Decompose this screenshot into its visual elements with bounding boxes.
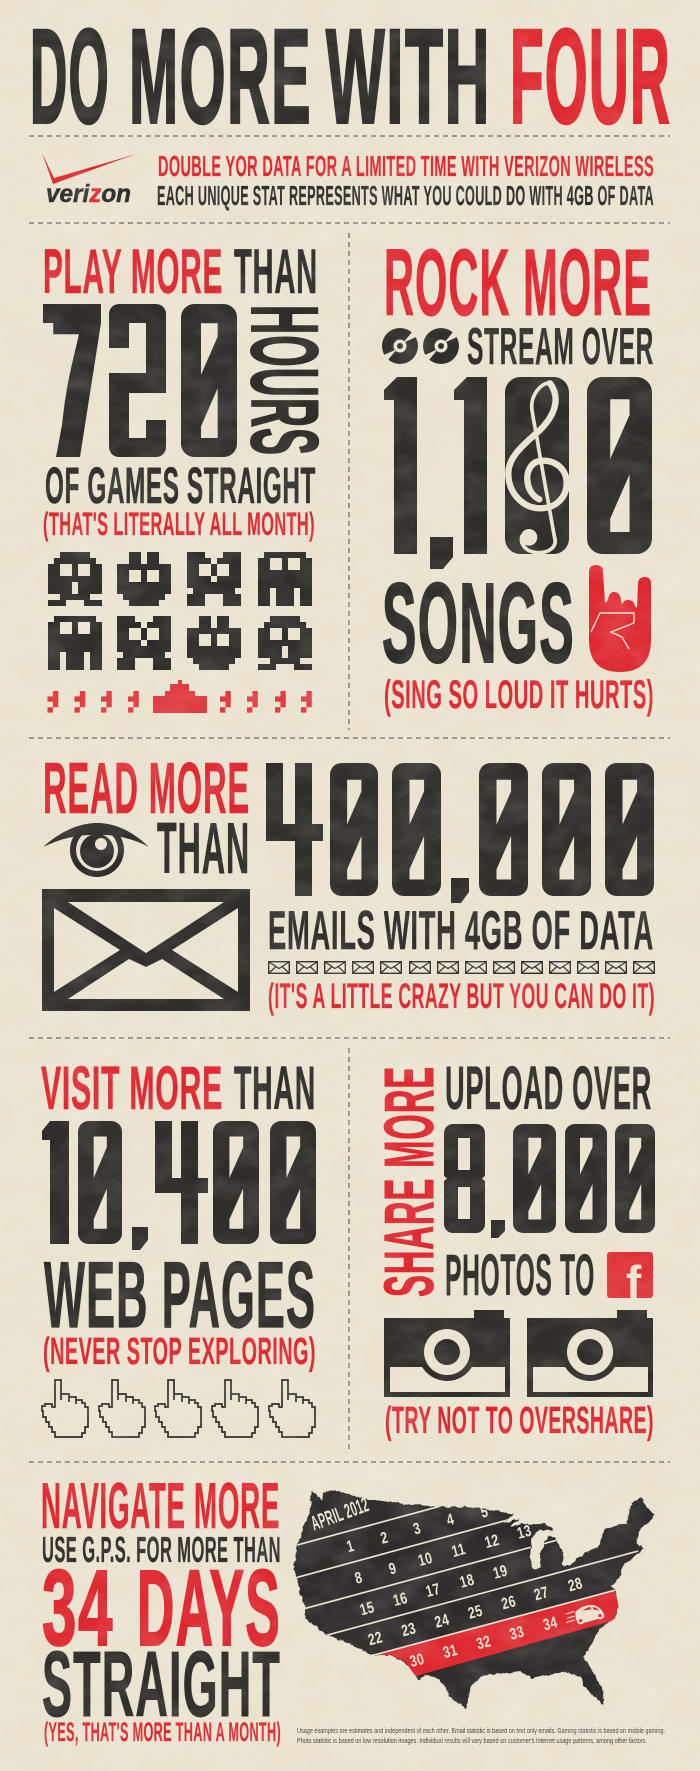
stat: 400,000 xyxy=(265,726,654,932)
calendar dates: 4 xyxy=(445,1511,456,1530)
calendar dates: 26 xyxy=(500,1593,518,1614)
stat: 1,100: 0 xyxy=(507,334,567,602)
infographic canvas: 0 xyxy=(272,1092,314,1276)
icon: eye xyxy=(43,823,149,877)
icon: facebook: f xyxy=(626,1256,642,1308)
map silhouette xyxy=(294,1490,655,1708)
stat: 720: 7 xyxy=(50,265,94,500)
stat: 400,000: 0 xyxy=(481,732,526,931)
calendar dates: 1 xyxy=(345,1537,356,1557)
red band and calendar rules xyxy=(290,1505,647,1676)
stat: 1,100: 1 xyxy=(396,330,415,604)
infographic canvas: USE G.P.S. FOR MORE THAN xyxy=(42,1529,281,1570)
verizon logo xyxy=(42,153,136,208)
icon: facebook xyxy=(607,1252,653,1308)
infographic canvas: NAVIGATE MORE xyxy=(41,1469,280,1542)
infographic canvas: (YES, THAT'S MORE THAN A MONTH) xyxy=(44,1717,281,1747)
infographic canvas: STRAIGHT xyxy=(42,1632,281,1736)
stat: 34 days: 34 xyxy=(42,1547,114,1668)
calendar dates: 11 xyxy=(450,1541,468,1561)
icon row: small envelopes xyxy=(269,962,654,973)
stat: 400,000: 0 xyxy=(544,732,589,931)
title xyxy=(30,2,671,152)
stat: 8,000: 0 xyxy=(515,1099,554,1263)
calendar dates: 17 xyxy=(424,1580,442,1602)
heading: play more than: PLAY MORE xyxy=(43,237,223,307)
icon: cameras xyxy=(384,1310,653,1397)
panel: read more xyxy=(42,726,655,1016)
title: MORE xyxy=(129,2,312,152)
panel: play more: THAN xyxy=(234,237,318,307)
infographic canvas: DAYS xyxy=(137,1547,281,1668)
stat: 8,000: 8 xyxy=(446,1095,482,1263)
title: DO xyxy=(30,2,110,152)
infographic canvas: SHARE MORE xyxy=(370,1066,448,1297)
calendar dates: 31 xyxy=(441,1641,460,1663)
stat: 8,000: , xyxy=(493,1193,503,1237)
stat: 8,000 xyxy=(443,1095,655,1263)
calendar dates: 24 xyxy=(433,1611,451,1632)
calendar dates: 8 xyxy=(353,1569,365,1588)
stat: 720: 2 xyxy=(111,265,164,500)
calendar dates: 25 xyxy=(466,1602,485,1623)
panel: play more: 0 xyxy=(183,267,235,497)
calendar dates: 3 xyxy=(411,1520,423,1539)
panel: navigate more xyxy=(41,1469,281,1747)
calendar dates: 16 xyxy=(391,1589,410,1611)
calendar dates: 5 xyxy=(479,1503,490,1522)
calendar dates: 32 xyxy=(475,1633,493,1654)
infographic canvas: 0 xyxy=(617,1099,653,1263)
calendar dates: 28 xyxy=(566,1575,585,1596)
calendar dates: 23 xyxy=(400,1620,418,1641)
stat: 10,400: 4 xyxy=(157,1088,205,1278)
calendar dates: 9 xyxy=(387,1560,399,1579)
stat: 400,000: , xyxy=(454,839,466,901)
stat: 10,400 xyxy=(42,1087,316,1279)
infographic canvas: THAN xyxy=(234,1054,316,1122)
chart: calendar map of the USA xyxy=(290,1490,655,1708)
stat: 10,400: 0 xyxy=(215,1092,257,1276)
stat: 34 days xyxy=(42,1547,281,1668)
calendar month label: APRIL 2012 xyxy=(308,1493,372,1535)
panel: read more: READ MORE xyxy=(43,749,250,829)
stat: 10,400: 1 xyxy=(51,1087,68,1279)
infographic canvas: WEB PAGES xyxy=(44,1242,316,1347)
icon: compact discs xyxy=(382,328,459,364)
stat: 400,000: 0 xyxy=(394,732,439,931)
calendar dates: 22 xyxy=(366,1629,385,1650)
panel: play more xyxy=(43,237,337,713)
calendar dates: 33 xyxy=(508,1623,526,1644)
stat: 400,000: 0 xyxy=(332,732,376,931)
stat: 400,000: 4 xyxy=(270,726,320,932)
panel: play more: HOURS xyxy=(231,305,337,456)
calendar dates: 15 xyxy=(358,1599,376,1620)
calendar dates: 18 xyxy=(458,1571,476,1592)
icon: invader ship and shots xyxy=(48,680,312,713)
calendar dates: 30 xyxy=(408,1650,426,1672)
panel: share more xyxy=(370,1054,655,1442)
stat: 10,400: , xyxy=(134,1191,145,1247)
panel: play more: OF GAMES STRAIGHT xyxy=(45,457,316,514)
calendar dates: 13 xyxy=(515,1522,534,1543)
icon: car xyxy=(566,1605,604,1624)
panel: rock more xyxy=(382,230,654,717)
calendar dates: 2 xyxy=(379,1529,390,1548)
stat: 1,100: , xyxy=(434,492,449,570)
calendar dates xyxy=(345,1503,585,1672)
calendar dates: 19 xyxy=(491,1562,510,1583)
stat: 1,100 xyxy=(384,330,652,604)
panel: visit more xyxy=(41,1054,316,1437)
calendar dates: 27 xyxy=(532,1584,551,1605)
title: WITH xyxy=(326,2,491,152)
stat: 720 xyxy=(43,265,237,500)
icon: rock hand xyxy=(589,565,651,672)
intro text xyxy=(157,151,654,211)
callout: (THAT'S LITERALLY ALL MONTH) xyxy=(43,506,315,542)
icon: envelope xyxy=(42,889,250,1011)
stat: 8,000: 0 xyxy=(567,1099,605,1263)
calendar dates: 12 xyxy=(483,1531,501,1553)
verizon logo: verizon xyxy=(46,180,131,208)
callout: (NEVER STOP EXPLORING) xyxy=(43,1331,316,1373)
stat: 1,100: 1 xyxy=(466,330,485,604)
panel: read more: THAN xyxy=(157,809,250,889)
icon row: pointer hands xyxy=(42,1380,315,1437)
calendar dates: 34 xyxy=(541,1614,560,1635)
heading: VISIT MORE xyxy=(41,1054,223,1122)
calendar dates: 10 xyxy=(416,1549,435,1571)
stat: 10,400: 0 xyxy=(80,1092,120,1276)
icon: treble clef xyxy=(508,383,567,553)
footnote xyxy=(297,1726,665,1745)
icon: space invaders xyxy=(48,555,312,667)
